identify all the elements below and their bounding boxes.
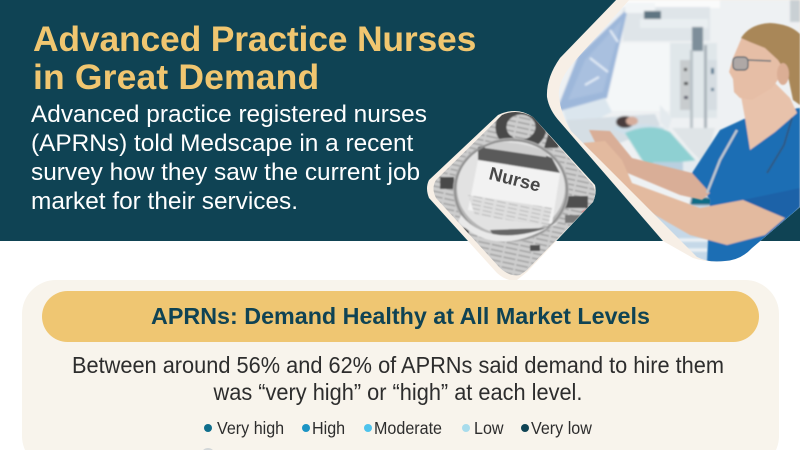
legend: high: High (312, 418, 345, 438)
legend: very low: Very low (531, 418, 592, 438)
photo: Nurse ad under magnifying glass (427, 111, 596, 280)
photo: Nurse ad under magnifying glass: Nurse (487, 163, 543, 196)
panel heading pill (42, 291, 759, 342)
photos (427, 0, 800, 280)
legend: moderate: Moderate (374, 418, 442, 438)
title (33, 19, 476, 97)
title: Advanced Practice Nurses (33, 19, 476, 59)
panel heading pill: APRNs: Demand Healthy at All Market Levels (151, 303, 650, 329)
stethoscope (707, 130, 737, 193)
intro text (31, 101, 427, 215)
neck and face (741, 80, 797, 150)
intro text: (APRNs) told Medscape in a recent (31, 130, 413, 157)
panel description: was “very high” or “high” at each level. (214, 379, 582, 405)
far arm (589, 130, 710, 200)
intro text: market for their services. (31, 188, 298, 215)
scrubs (692, 108, 800, 262)
panel description: Between around 56% and 62% of APRNs said demand to hire them (72, 352, 724, 378)
photo: nurse at patient bedside (547, 0, 800, 270)
panel: market levels (22, 280, 779, 450)
near arm (583, 141, 785, 245)
cut-off chart icon at bottom edge (201, 448, 215, 450)
intro text: Advanced practice registered nurses (31, 101, 427, 128)
legend: low: Low (474, 418, 504, 438)
title: in Great Demand (33, 57, 319, 97)
panel description (72, 352, 724, 405)
header band (0, 0, 800, 241)
legend (204, 418, 592, 438)
legend: very high: Very high (217, 418, 284, 438)
intro text: survey how they saw the current job (31, 159, 420, 186)
